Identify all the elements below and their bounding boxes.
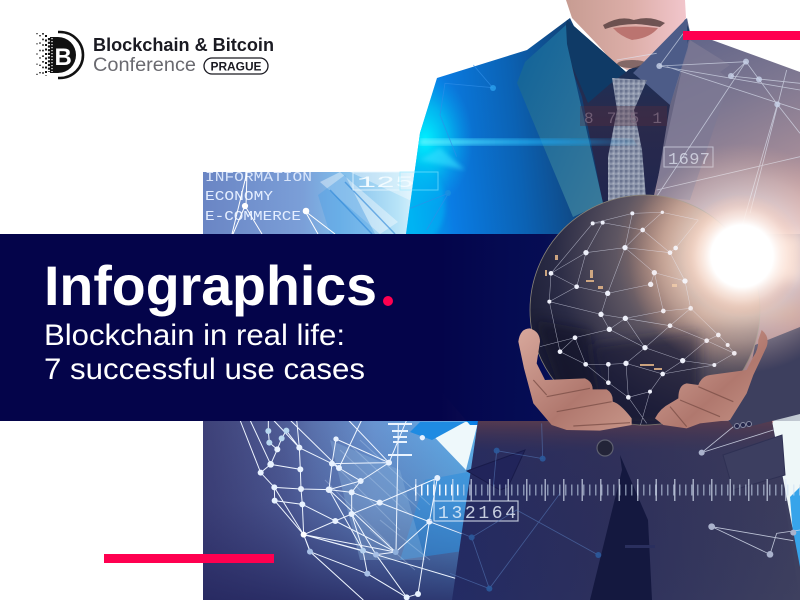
dark title band	[0, 234, 800, 421]
shirt	[563, 18, 690, 204]
lips	[613, 26, 658, 40]
panel text: information economy e-commerce: E-COMMERCE	[205, 209, 301, 225]
right edge background: white and blue sliver	[772, 413, 800, 600]
right pocket flap	[723, 435, 785, 490]
city lights	[545, 245, 677, 370]
data boxes on chest: 8751	[584, 110, 662, 128]
left hand	[518, 328, 632, 431]
panel text: information economy e-commerce: INFORMATION	[205, 170, 312, 186]
lens flare on globe	[628, 143, 800, 373]
data box 132164: 132164	[438, 504, 516, 524]
suit network upper	[410, 33, 800, 233]
title accent dot	[383, 296, 393, 306]
shirt collar left	[563, 20, 626, 103]
logo	[37, 32, 274, 78]
data boxes on chest	[400, 106, 713, 190]
network nodes	[258, 428, 440, 600]
photo panel: lower city and network	[203, 420, 490, 600]
lens flare blue	[406, 82, 636, 234]
number box 1256	[353, 172, 438, 192]
title: Infographics	[44, 254, 377, 317]
network mesh	[240, 420, 490, 600]
logo letter B: B	[54, 44, 72, 71]
subtitle: Blockchain in real life:	[44, 319, 345, 352]
accent bar top right	[683, 31, 800, 40]
jacket upper left	[380, 18, 625, 425]
panel text: information economy e-commerce	[205, 170, 312, 225]
logo wordmark line two: Conference	[93, 55, 196, 76]
network on upper panel	[232, 172, 335, 234]
jacket upper right	[610, 18, 800, 425]
globe	[530, 195, 760, 427]
logo wordmark line one: Blockchain & Bitcoin	[93, 34, 274, 55]
subtitle: 7 successful use cases	[44, 353, 365, 386]
right lapel	[655, 40, 730, 200]
subtitle	[44, 319, 365, 386]
shirt collar right	[633, 18, 688, 105]
tick marker	[388, 424, 412, 455]
number box 1256: 1256	[357, 174, 433, 192]
globe mesh	[540, 212, 734, 427]
goatee	[617, 60, 647, 68]
sleeve buttons	[734, 422, 752, 428]
globe nodes	[547, 211, 737, 400]
panel text: information economy e-commerce: ECONOMY	[205, 189, 274, 205]
logo badge prague: PRAGUE	[210, 60, 262, 74]
jacket lower body	[452, 421, 800, 600]
ruler scale	[415, 484, 800, 496]
right sleeve	[715, 327, 800, 430]
right hand	[655, 330, 768, 428]
logo icon	[37, 32, 83, 78]
left pocket flap	[467, 450, 525, 490]
necktie	[608, 78, 647, 203]
left lapel	[517, 25, 603, 217]
jacket button	[597, 440, 613, 456]
data boxes on chest: 1697	[668, 151, 710, 170]
accent bar bottom left	[104, 554, 274, 563]
photo panel: upper city with text	[203, 170, 438, 236]
face	[566, 0, 686, 70]
moustache	[603, 18, 665, 29]
suit network lower	[430, 423, 800, 592]
